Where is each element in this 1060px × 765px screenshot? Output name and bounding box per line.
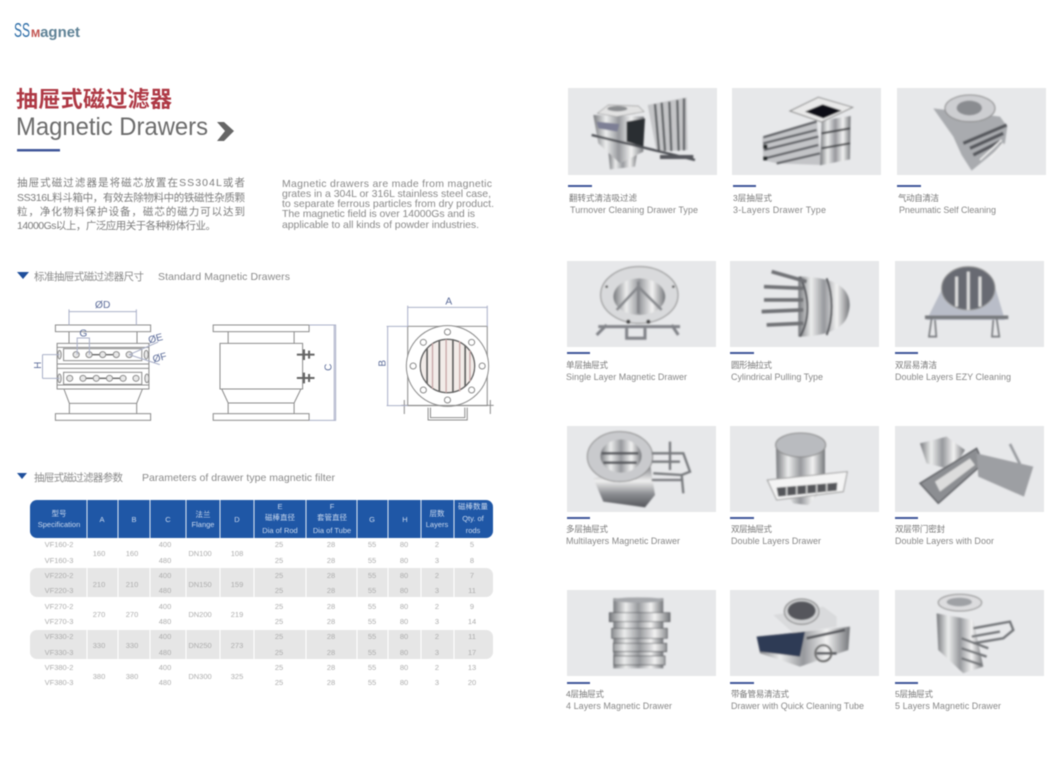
table rows: 219 bbox=[231, 610, 243, 619]
table rows: 80 bbox=[400, 663, 408, 672]
table header: 套管直径 bbox=[317, 512, 347, 522]
title underline bbox=[17, 149, 60, 152]
table rows: 400 bbox=[159, 540, 171, 549]
table rows bbox=[45, 540, 476, 687]
product: drawer with quick cleaning tube: 带备管易清洁式 bbox=[731, 689, 789, 699]
table rows: DN300 bbox=[188, 672, 212, 681]
product: pneumatic self cleaning: 气动自清洁 bbox=[898, 193, 939, 203]
text block: English intro: applicable to all kinds of powder industries. bbox=[282, 219, 479, 231]
table rows: VF270-3 bbox=[45, 617, 73, 626]
table header: H bbox=[402, 515, 408, 524]
product: drawer with quick cleaning tube bbox=[730, 590, 879, 711]
table rows: 5 bbox=[470, 540, 474, 549]
table rows: 160 bbox=[93, 549, 105, 558]
table header: E bbox=[277, 502, 283, 511]
product: cylindrical pulling type: 圆形抽拉式 bbox=[731, 360, 772, 370]
table rows: 20 bbox=[468, 678, 476, 687]
product: 4 layers magnetic drawer bbox=[566, 590, 716, 711]
table rows: 14 bbox=[468, 617, 476, 626]
table rows: DN200 bbox=[188, 610, 212, 619]
heading: standard dimensions: 标准抽屉式磁过滤器尺寸 bbox=[34, 270, 144, 283]
product: 5 layers magnetic drawer: 5层抽屉式 bbox=[895, 689, 933, 699]
table rows: 25 bbox=[275, 571, 283, 580]
diagram: side view: C bbox=[323, 364, 335, 371]
product: 3-layers drawer bbox=[732, 88, 881, 215]
table rows: VF330-3 bbox=[45, 648, 73, 657]
table rows: 270 bbox=[126, 610, 138, 619]
product: turnover cleaning drawer bbox=[568, 88, 717, 215]
product: pneumatic self cleaning bbox=[897, 88, 1046, 215]
table rows: 325 bbox=[231, 672, 243, 681]
table rows: 55 bbox=[368, 648, 376, 657]
diagram: front view: ØF bbox=[152, 351, 168, 365]
diagram: front view: G bbox=[79, 328, 87, 339]
table row bands bbox=[30, 568, 493, 659]
heading: standard dimensions: Standard Magnetic Drawers bbox=[158, 271, 290, 283]
table rows: 2 bbox=[435, 602, 439, 611]
table rows: 25 bbox=[275, 540, 283, 549]
table rows: 80 bbox=[400, 602, 408, 611]
table rows: 480 bbox=[159, 556, 171, 565]
table rows: 55 bbox=[368, 632, 376, 641]
table rows: 330 bbox=[93, 641, 105, 650]
product: 3-layers drawer: 3层抽屉式 bbox=[733, 193, 772, 203]
text block: English intro: Magnetic drawers are made from magnetic bbox=[282, 178, 492, 190]
diagram: front view: ØD bbox=[95, 300, 110, 311]
table header: rods bbox=[466, 526, 481, 535]
table rows: 160 bbox=[126, 549, 138, 558]
table rows: 28 bbox=[327, 617, 335, 626]
table header: D bbox=[234, 515, 240, 524]
table rows: 80 bbox=[400, 586, 408, 595]
table rows: 28 bbox=[327, 678, 335, 687]
heading: standard dimensions bbox=[17, 270, 290, 283]
table rows: 210 bbox=[93, 580, 105, 589]
table rows: 108 bbox=[231, 549, 243, 558]
table rows: 80 bbox=[400, 540, 408, 549]
table rows: VF330-2 bbox=[45, 632, 73, 641]
table rows: 3 bbox=[435, 678, 439, 687]
diagram: top view: A bbox=[445, 297, 453, 308]
table rows: 3 bbox=[435, 586, 439, 595]
table rows: 210 bbox=[126, 580, 138, 589]
text block: English intro: grates in a 304L or 316L stainless steel case, bbox=[282, 188, 491, 200]
product: double layers with door: 双层带门密封 bbox=[895, 524, 945, 534]
logo: Magnet bbox=[31, 24, 80, 41]
product: 5 layers magnetic drawer: 5 Layers Magnetic Drawer bbox=[895, 701, 1001, 711]
table rows: 25 bbox=[275, 648, 283, 657]
title: Magnetic Drawers bbox=[16, 113, 208, 141]
diagram: side view bbox=[213, 325, 336, 420]
product: double layers with door: Double Layers with Door bbox=[895, 536, 994, 546]
table header: 型号 bbox=[52, 509, 66, 518]
product: turnover cleaning drawer: Turnover Cleaning Drawer Type bbox=[570, 205, 698, 215]
table rows: 80 bbox=[400, 571, 408, 580]
product: 3-layers drawer: 3-Layers Drawer Type bbox=[733, 205, 826, 215]
table rows: DN250 bbox=[188, 641, 212, 650]
table rows: 3 bbox=[435, 556, 439, 565]
table rows: 480 bbox=[159, 648, 171, 657]
table header: A bbox=[99, 515, 105, 524]
table rows: 80 bbox=[400, 617, 408, 626]
table header: Qty. of bbox=[462, 514, 485, 523]
icon: chevron bbox=[217, 122, 234, 141]
product: 4 layers magnetic drawer: 4 Layers Magnetic Drawer bbox=[566, 701, 672, 711]
table header bbox=[30, 500, 493, 538]
table header: F bbox=[330, 502, 335, 511]
product: cylindrical pulling type bbox=[730, 261, 879, 382]
table rows: 400 bbox=[159, 632, 171, 641]
table rows: 270 bbox=[93, 610, 105, 619]
table rows: 480 bbox=[159, 617, 171, 626]
product: multilayers magnetic drawer: 多层抽屉式 bbox=[566, 524, 608, 534]
table rows: 480 bbox=[159, 678, 171, 687]
text block: Chinese intro: 14000Gs以上，广泛应用关于各种粉体行业。 bbox=[17, 219, 216, 232]
table rows: 7 bbox=[470, 571, 474, 580]
table rows: 55 bbox=[368, 556, 376, 565]
table rows: 28 bbox=[327, 571, 335, 580]
product: cylindrical pulling type: Cylindrical Pulling Type bbox=[731, 372, 823, 382]
table rows: VF220-2 bbox=[45, 571, 73, 580]
table rows: 25 bbox=[275, 556, 283, 565]
table rows: 25 bbox=[275, 663, 283, 672]
title: 抽屉式磁过滤器 bbox=[16, 87, 172, 112]
product: single layer magnetic drawer bbox=[566, 261, 716, 382]
table rows: DN150 bbox=[188, 580, 212, 589]
table: parameters bbox=[30, 500, 493, 687]
table rows: 3 bbox=[435, 617, 439, 626]
table rows: 400 bbox=[159, 571, 171, 580]
table rows: 80 bbox=[400, 678, 408, 687]
product: double layers drawer: 双层抽屉式 bbox=[731, 524, 772, 534]
table rows: 2 bbox=[435, 663, 439, 672]
product: double layers EZY cleaning: Double Layers EZY Cleaning bbox=[895, 372, 1011, 382]
table rows: 480 bbox=[159, 586, 171, 595]
diagram: front view: ØE bbox=[147, 332, 165, 346]
product: multilayers magnetic drawer: Multilayers Magnetic Drawer bbox=[566, 536, 680, 546]
heading: parameters: 抽屉式磁过滤器参数 bbox=[34, 471, 124, 484]
logo: SS bbox=[14, 20, 30, 42]
table header: Specification bbox=[38, 520, 80, 529]
product: double layers with door bbox=[895, 426, 1044, 546]
heading: parameters: Parameters of drawer type magnetic filter bbox=[142, 472, 336, 484]
table header: 法兰 bbox=[196, 509, 211, 519]
diagram: front view: H bbox=[33, 362, 44, 369]
table rows: 55 bbox=[368, 586, 376, 595]
table header: 磁棒直径 bbox=[265, 512, 295, 522]
table rows: 80 bbox=[400, 648, 408, 657]
table rows: 28 bbox=[327, 556, 335, 565]
text block: Chinese intro: 抽屉式磁过滤器是将磁芯放置在SS304L或者 bbox=[17, 176, 245, 189]
table rows: VF270-2 bbox=[45, 602, 73, 611]
text block: Chinese intro: SS316L料斗箱中，有效去除物料中的铁磁性杂质颗 bbox=[17, 191, 246, 204]
table rows: 25 bbox=[275, 617, 283, 626]
diagram: front view bbox=[33, 300, 168, 420]
table rows: 55 bbox=[368, 617, 376, 626]
table header: 磁棒数量 bbox=[458, 501, 488, 511]
heading: parameters bbox=[17, 471, 336, 484]
logo bbox=[14, 20, 80, 42]
table header: Layers bbox=[426, 520, 449, 529]
table rows: 55 bbox=[368, 678, 376, 687]
product: pneumatic self cleaning: Pneumatic Self Cleaning bbox=[899, 205, 996, 215]
title bbox=[16, 87, 208, 141]
table rows: 28 bbox=[327, 586, 335, 595]
product: double layers drawer: Double Layers Drawer bbox=[731, 536, 821, 546]
table rows: 55 bbox=[368, 663, 376, 672]
table rows: VF160-3 bbox=[45, 556, 73, 565]
table rows: 13 bbox=[468, 663, 476, 672]
table rows: 80 bbox=[400, 632, 408, 641]
product: double layers drawer bbox=[730, 426, 879, 546]
table rows: 2 bbox=[435, 632, 439, 641]
table header: C bbox=[165, 515, 171, 524]
table rows: 80 bbox=[400, 556, 408, 565]
text block: English intro bbox=[282, 178, 494, 231]
table rows: 28 bbox=[327, 602, 335, 611]
table rows: VF380-3 bbox=[45, 678, 73, 687]
table rows: 400 bbox=[159, 602, 171, 611]
table rows: 25 bbox=[275, 586, 283, 595]
table rows: 330 bbox=[126, 641, 138, 650]
table header: B bbox=[131, 515, 137, 524]
table rows: 11 bbox=[468, 632, 476, 641]
table rows: 3 bbox=[435, 648, 439, 657]
diagram: top view: B bbox=[378, 360, 389, 367]
table rows: 55 bbox=[368, 602, 376, 611]
table rows: VF160-2 bbox=[45, 540, 73, 549]
product: 4 layers magnetic drawer: 4层抽屉式 bbox=[566, 689, 604, 699]
table rows: 380 bbox=[93, 672, 105, 681]
table rows: 11 bbox=[468, 586, 476, 595]
table rows: 55 bbox=[368, 571, 376, 580]
table header: Dia of Tube bbox=[313, 526, 351, 535]
table rows: 55 bbox=[368, 540, 376, 549]
text block: Chinese intro: 粒，净化物料保护设备，磁芯的磁力可以达到 bbox=[17, 205, 245, 218]
text block: Chinese intro bbox=[17, 176, 246, 232]
product: double layers EZY cleaning bbox=[895, 261, 1044, 382]
table rows: 159 bbox=[231, 580, 243, 589]
product: turnover cleaning drawer: 翻转式清洁吸过滤 bbox=[569, 193, 637, 203]
table rows: 25 bbox=[275, 602, 283, 611]
table rows: 28 bbox=[327, 663, 335, 672]
table header: G bbox=[369, 515, 375, 524]
product: 5 layers magnetic drawer bbox=[895, 590, 1044, 711]
table rows: 25 bbox=[275, 632, 283, 641]
table rows: DN100 bbox=[188, 549, 212, 558]
table header: Flange bbox=[192, 520, 214, 529]
product: drawer with quick cleaning tube: Drawer with Quick Cleaning Tube bbox=[731, 701, 864, 711]
table rows: VF220-3 bbox=[45, 586, 73, 595]
table rows: 400 bbox=[159, 663, 171, 672]
table rows: 28 bbox=[327, 632, 335, 641]
table rows: 273 bbox=[231, 641, 243, 650]
table rows: 28 bbox=[327, 648, 335, 657]
diagram: top view bbox=[378, 297, 494, 420]
product: single layer magnetic drawer: 单层抽屉式 bbox=[566, 360, 608, 370]
product: single layer magnetic drawer: Single Layer Magnetic Drawer bbox=[566, 372, 687, 382]
table rows: 25 bbox=[275, 678, 283, 687]
product: multilayers magnetic drawer bbox=[566, 426, 716, 546]
table rows: 28 bbox=[327, 540, 335, 549]
table rows: 8 bbox=[470, 556, 474, 565]
table rows: 380 bbox=[126, 672, 138, 681]
table rows: VF380-2 bbox=[45, 663, 73, 672]
table rows: 2 bbox=[435, 571, 439, 580]
table rows: 17 bbox=[468, 648, 476, 657]
table rows: 9 bbox=[470, 602, 474, 611]
table header: Dia of Rod bbox=[262, 526, 298, 535]
text block: English intro: to separate ferrous particles from dry product. bbox=[282, 198, 494, 210]
table header: 层数 bbox=[430, 508, 445, 518]
product: double layers EZY cleaning: 双层易清洁 bbox=[895, 360, 937, 370]
text block: English intro: The magnetic field is over 14000Gs and is bbox=[282, 208, 475, 220]
table rows: 2 bbox=[435, 540, 439, 549]
